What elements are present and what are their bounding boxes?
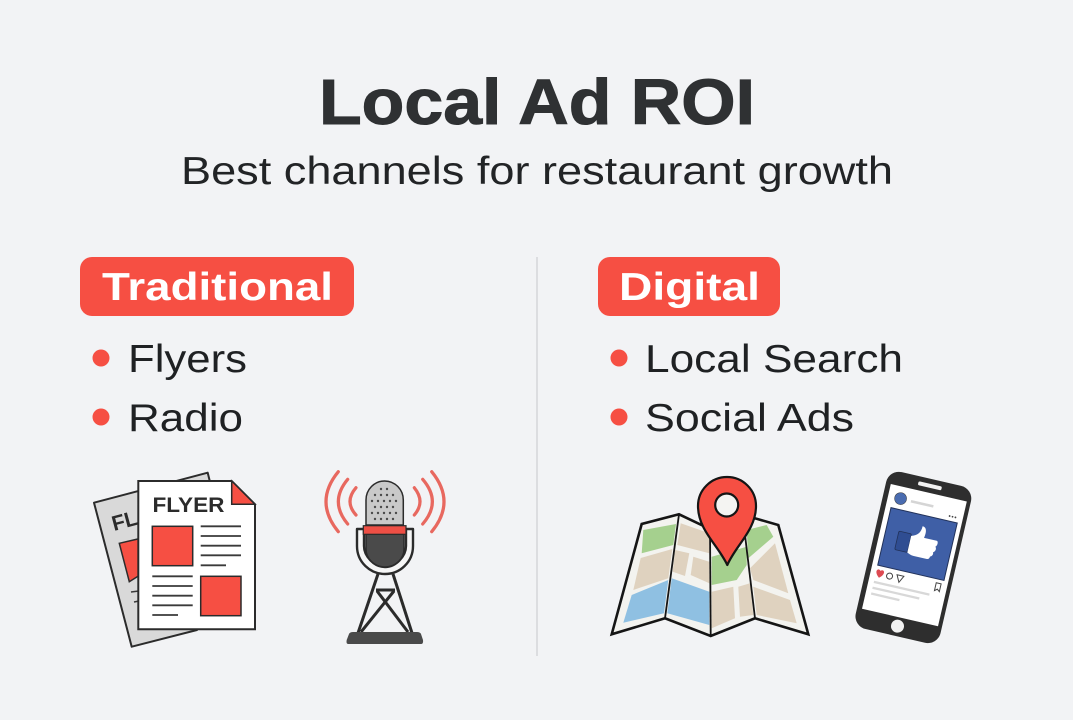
panel: traditional bbox=[80, 257, 444, 647]
icon: location pin bbox=[698, 477, 756, 565]
icon: flyers bbox=[94, 473, 255, 647]
panel: digital bbox=[598, 257, 974, 646]
subtitle: Best channels for restaurant growth bbox=[181, 150, 893, 193]
icon: phone with social ad bbox=[853, 469, 974, 646]
icon: flyers: FL bbox=[109, 507, 140, 536]
icon: thumbs up bbox=[894, 521, 941, 561]
icon: map with pin bbox=[612, 477, 808, 636]
icon: flyers: FLYER bbox=[152, 494, 224, 517]
badge: Digital: Digital bbox=[619, 266, 760, 309]
icon: radio microphone bbox=[326, 472, 444, 644]
badge: Traditional bbox=[80, 257, 354, 316]
list item: Radio bbox=[92, 397, 243, 440]
title: Local Ad ROI bbox=[319, 66, 755, 138]
list item: Local Search: Local Search bbox=[645, 338, 903, 381]
list item: Flyers bbox=[92, 338, 247, 381]
badge: Digital bbox=[598, 257, 780, 316]
list item: Social Ads: Social Ads bbox=[645, 397, 854, 440]
list item: Flyers: Flyers bbox=[128, 338, 247, 381]
list item: Radio: Radio bbox=[128, 397, 243, 440]
badge: Traditional: Traditional bbox=[102, 266, 333, 309]
